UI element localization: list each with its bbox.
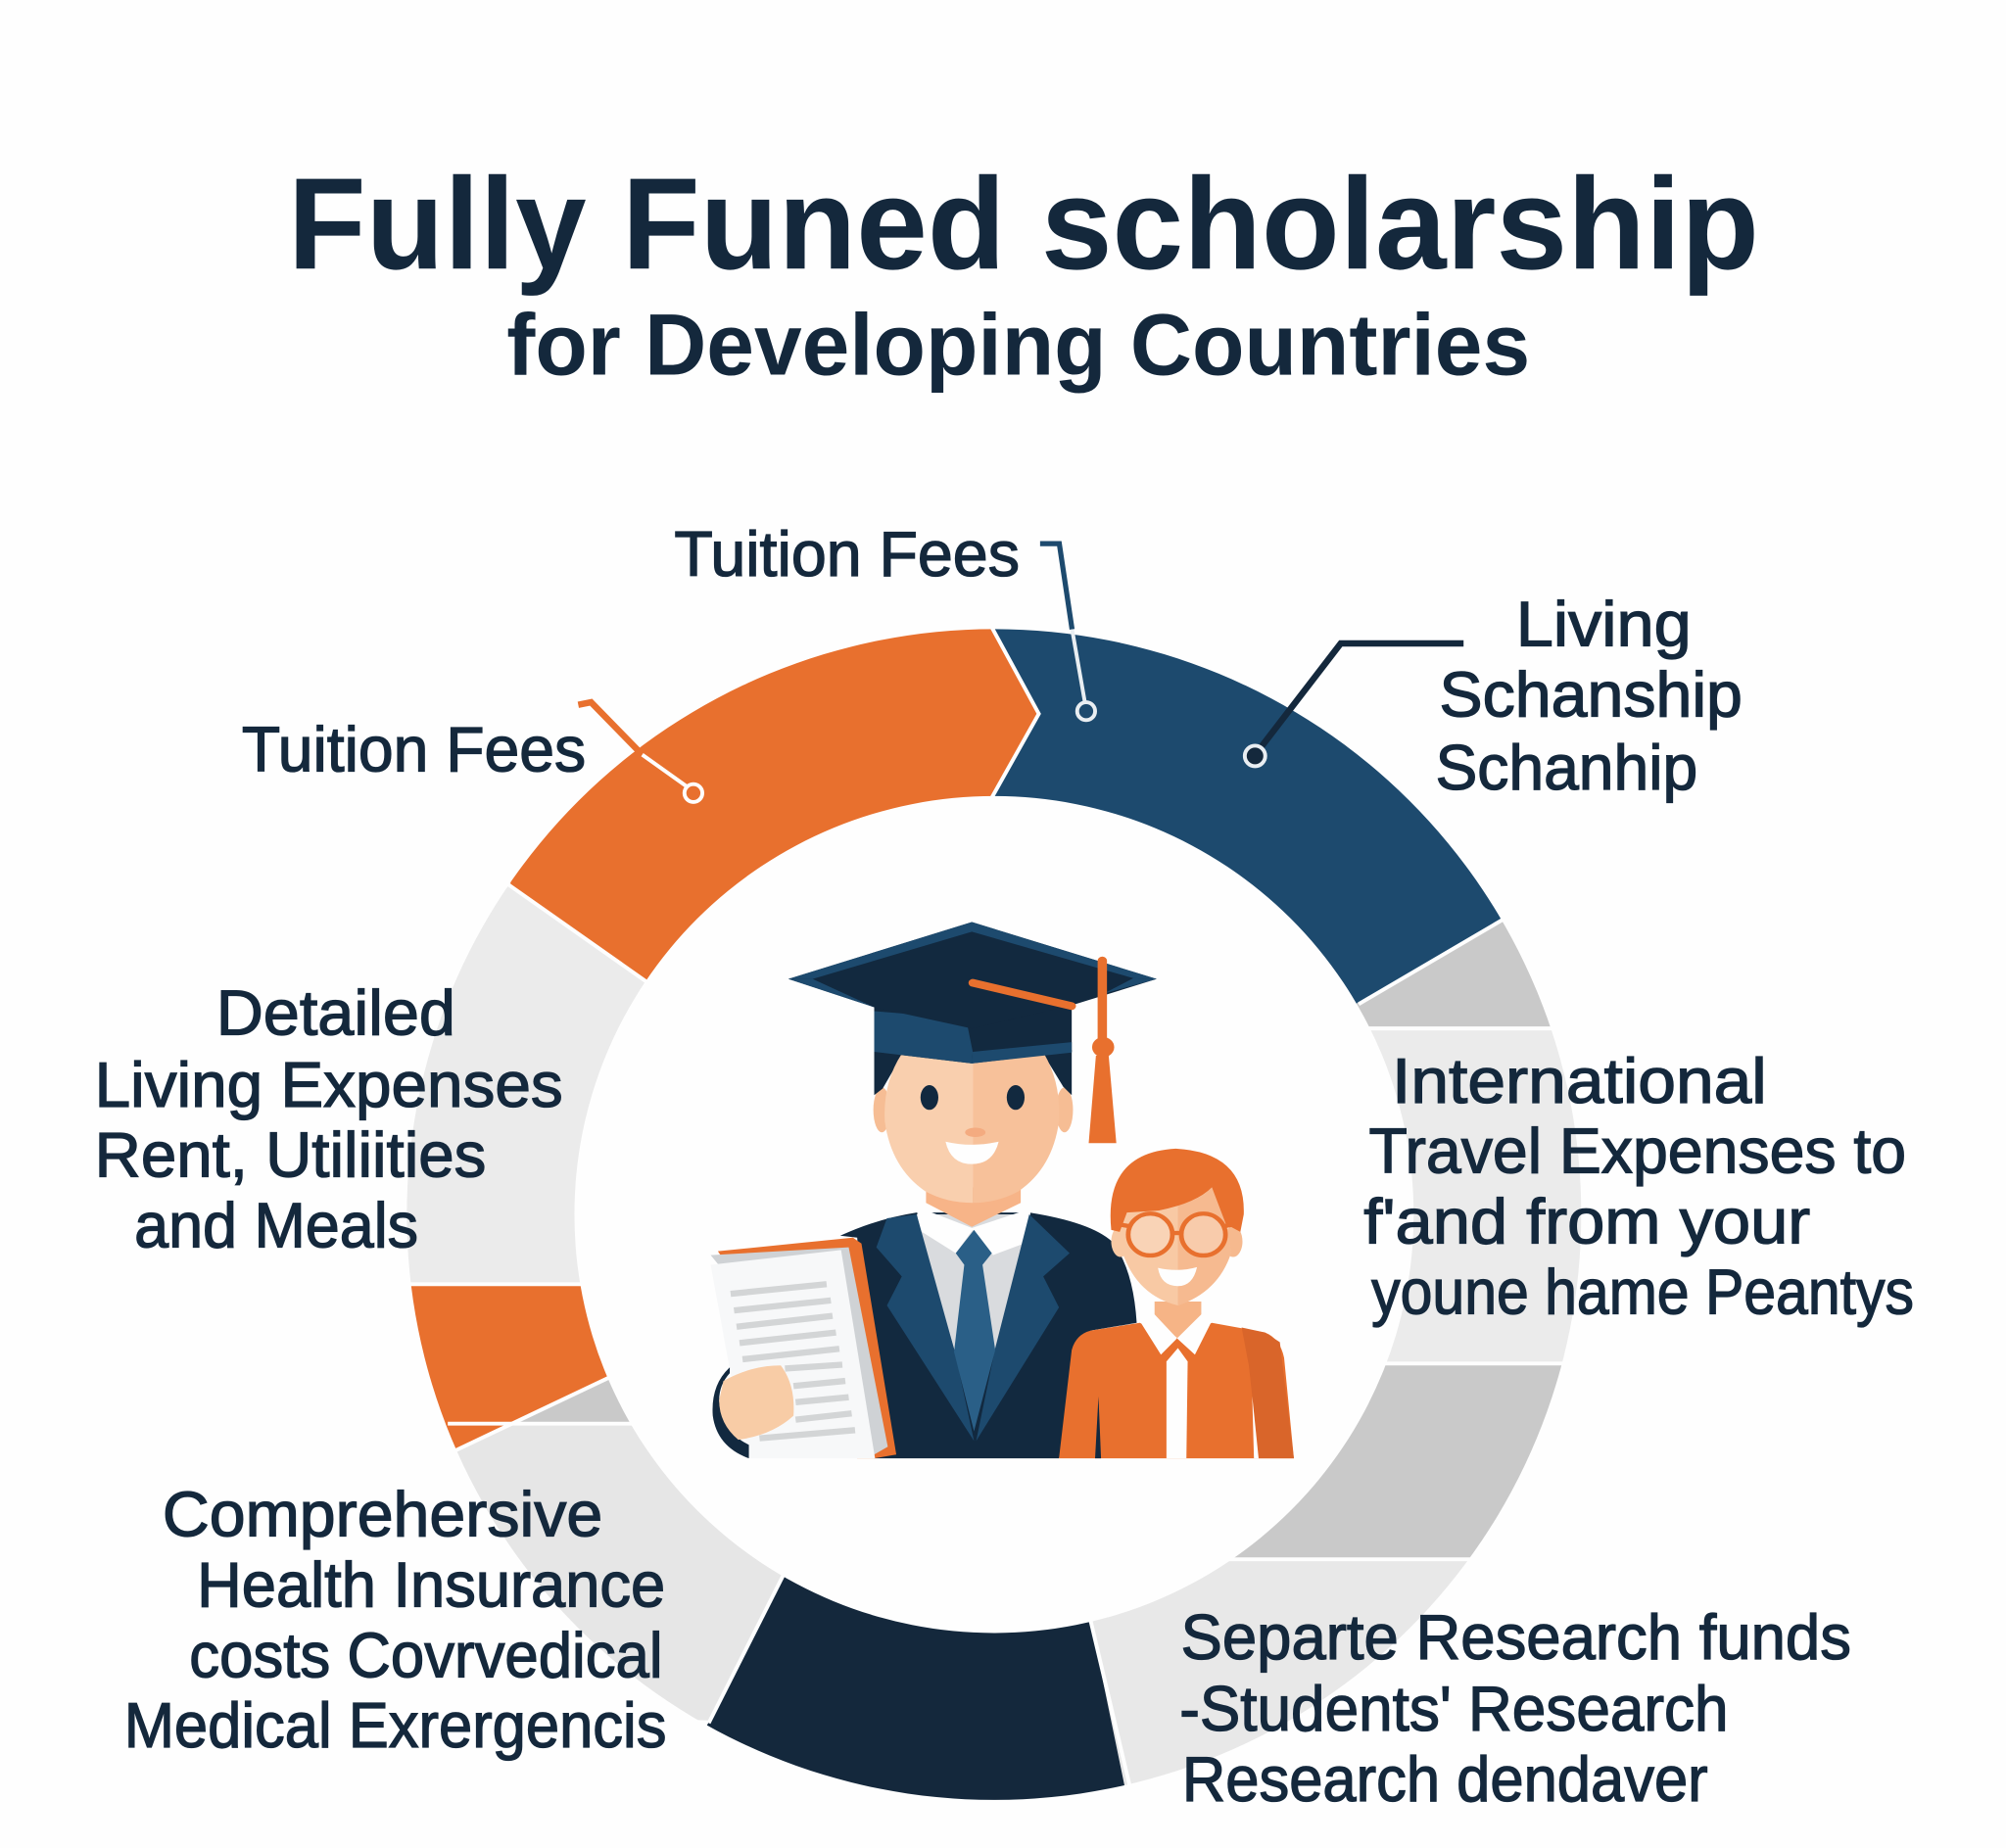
callout: living (1245, 643, 1463, 766)
cap strap and tassel (973, 961, 1117, 1143)
donut ring chart (407, 629, 1581, 1800)
graduate jacket (840, 1212, 1137, 1458)
lapel right (977, 1214, 1070, 1441)
lapel left (877, 1214, 974, 1441)
student neck and collar (1140, 1302, 1212, 1354)
label: living expenses (95, 977, 563, 1260)
ring separators (406, 627, 1581, 1785)
ears (874, 1087, 1073, 1132)
label: living expenses: Detailed (216, 977, 455, 1049)
label: research funds (1179, 1601, 1851, 1815)
mortarboard cap (788, 923, 1157, 1064)
hand and sleeve (712, 1365, 793, 1458)
label: living scholarship: Schanhip (1435, 732, 1697, 803)
student mouth (1158, 1267, 1197, 1286)
neck (926, 1187, 1021, 1227)
label: international travel: f'and from your (1363, 1186, 1810, 1257)
label: living expenses: Living Expenses (95, 1049, 563, 1120)
label: health insurance: Comprehersive (163, 1479, 602, 1550)
label: top tuition fees: Tuition Fees (674, 518, 1020, 590)
title (288, 151, 1759, 394)
label: research funds: -Students' Research (1179, 1673, 1729, 1744)
glasses (1118, 1213, 1235, 1256)
label: left tuition fees: Tuition Fees (242, 714, 586, 785)
student face (1111, 1187, 1242, 1305)
subtitle: for Developing Countries (506, 297, 1530, 394)
central illustration: graduate and student (711, 923, 1294, 1458)
label: living scholarship (1435, 589, 1743, 803)
callout: orange tuition (578, 702, 702, 802)
label: international travel: youne hame Peantys (1371, 1256, 1914, 1327)
label: health insurance: Medical Exrergencis (124, 1689, 666, 1761)
label: living expenses: and Meals (134, 1189, 418, 1260)
label: international travel: Travel Expenses to (1369, 1115, 1906, 1187)
label: living scholarship: Living (1516, 589, 1692, 660)
eyes, nose, mouth (921, 1085, 1025, 1164)
label: health insurance: Health Insurance (197, 1548, 665, 1620)
label: health insurance (124, 1479, 666, 1761)
document (711, 1238, 896, 1458)
infographic canvas (99, 174, 1912, 1803)
student body (1059, 1323, 1294, 1458)
label: research funds: Research dendaver (1182, 1743, 1708, 1815)
label: research funds: Separte Research funds (1181, 1601, 1851, 1673)
shirt (917, 1214, 1029, 1369)
student hair (1111, 1149, 1244, 1232)
title: Fully Funed scholarship (288, 151, 1759, 297)
callout: blue tuition (1040, 544, 1095, 720)
label: international travel (1363, 1045, 1914, 1327)
label: living scholarship: Schanship (1439, 658, 1743, 730)
label: living expenses: Rent, Utiliities (95, 1119, 486, 1191)
collar (917, 1207, 1030, 1256)
tie (954, 1230, 995, 1431)
label: health insurance: costs Covrvedical (189, 1619, 663, 1690)
hair (874, 1050, 1072, 1095)
face (884, 1054, 1059, 1203)
label: international travel: International (1392, 1045, 1767, 1116)
